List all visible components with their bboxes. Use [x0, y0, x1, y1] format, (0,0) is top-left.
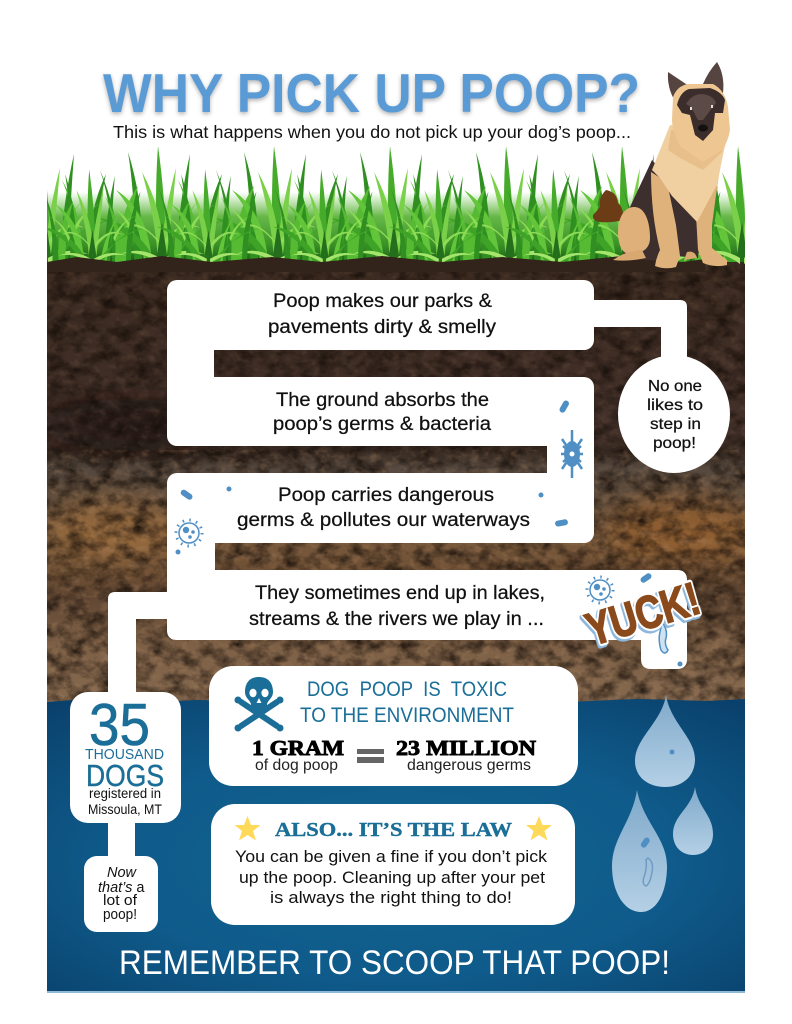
panel: it's the law: ALSO... IT’S THE LAW: [275, 819, 512, 841]
panel: it's the law: You can be given a fine if you don’t pick: [235, 847, 548, 866]
panel: step 1: [167, 280, 594, 350]
panel: toxic facts: of dog poop: [255, 757, 338, 774]
panel: it's the law: is always the right thing to do!: [270, 888, 512, 907]
connector: dog count to note: [108, 815, 135, 865]
panel: dog count: 35: [89, 692, 150, 758]
panel: step 4: streams & the rivers we play in ...: [249, 609, 544, 630]
panel: dog count: [70, 692, 181, 823]
panel: lot of poop note: that’s a: [98, 880, 145, 896]
icon: poop: [593, 190, 623, 222]
panel: lot of poop note: lot of: [103, 893, 138, 909]
panel: step 2: [167, 377, 594, 446]
panel: toxic facts: 23 MILLION: [396, 736, 536, 760]
callout: no one likes to step in poop: poop!: [653, 435, 696, 452]
rear thigh and foot: [618, 207, 650, 254]
chest and neck ruff: [652, 125, 729, 222]
panel: step 1: pavements dirty & smelly: [268, 317, 497, 338]
connector: steps 1 to 2: [167, 340, 214, 388]
yuck sticker: YUCK!: [580, 572, 706, 656]
water background: [47, 699, 745, 993]
dog illustration: [613, 62, 730, 268]
panel: toxic facts: TO THE ENVIRONMENT: [300, 704, 514, 727]
panel: toxic facts: 1 GRAM: [252, 736, 344, 760]
panel: dog count: THOUSAND: [85, 746, 164, 763]
panel: dog count: Missoula, MT: [88, 802, 162, 817]
left front leg: [651, 172, 680, 268]
panel: lot of poop note: poop!: [103, 907, 137, 923]
panel: toxic facts: [209, 666, 578, 786]
head: [672, 84, 730, 162]
title: WHY PICK UP POOP?: [103, 62, 640, 124]
panel: it's the law: up the poop. Cleaning up after your pet: [239, 868, 545, 887]
soil background: [40, 255, 755, 710]
panel: step 4: [167, 570, 687, 669]
icon: right star: [526, 816, 552, 840]
icon: water drops: [612, 695, 713, 912]
eyes: [691, 105, 712, 110]
nose: [698, 124, 708, 132]
panel: step 4: They sometimes end up in lakes,: [255, 583, 545, 604]
panel: step 3: Poop carries dangerous: [278, 485, 494, 506]
right ear: [703, 62, 723, 93]
panel: toxic facts: dangerous germs: [407, 757, 531, 774]
panel: step 2: poop’s germs & bacteria: [273, 414, 491, 435]
panel: lot of poop note: [84, 856, 158, 932]
grass: [47, 146, 745, 272]
panel: it's the law: [211, 804, 575, 925]
germs and bacteria icons: [176, 399, 682, 666]
dark back and belly: [622, 160, 702, 261]
panel: lot of poop note: Now: [107, 865, 138, 881]
equals sign: [357, 749, 384, 763]
callout: no one likes to step in poop: [618, 355, 730, 473]
left ear: [668, 72, 689, 101]
panel: dog count: registered in: [89, 786, 161, 801]
callout: no one likes to step in poop: No one: [648, 378, 702, 395]
closing message: REMEMBER TO SCOOP THAT POOP!: [119, 944, 670, 982]
icon: left star: [234, 816, 260, 840]
icon: skull and crossbones: [234, 677, 284, 732]
panel: step 1: Poop makes our parks &: [273, 291, 492, 312]
right front leg: [696, 155, 727, 266]
panel: step 3: [167, 473, 594, 543]
panel: step 3: germs & pollutes our waterways: [237, 510, 530, 531]
face mask: [677, 88, 725, 141]
connector: step 1 to callout: [585, 300, 687, 372]
yuck sticker: YUCK!: [580, 572, 706, 656]
panel: step 2: The ground absorbs the: [276, 390, 489, 411]
callout: no one likes to step in poop: likes to: [647, 397, 703, 414]
panel: dog count: DOGS: [86, 758, 164, 793]
connector: steps 2 to 3: [547, 436, 594, 483]
forehead: [686, 94, 716, 120]
connector: step 4 to dog count: [108, 592, 180, 700]
connector: steps 3 to 4: [167, 533, 215, 580]
subtitle: This is what happens when you do not pick up your dog’s poop...: [113, 122, 631, 142]
callout: no one likes to step in poop: step in: [650, 416, 701, 433]
panel: toxic facts: DOG POOP IS TOXIC: [307, 678, 507, 701]
